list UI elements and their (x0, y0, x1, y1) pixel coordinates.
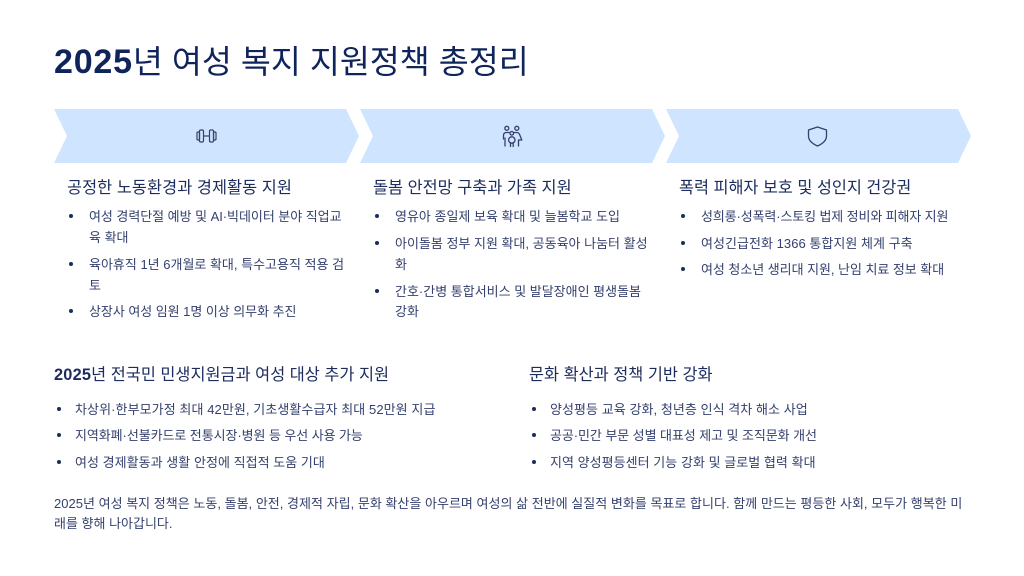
panel: labor (67, 178, 344, 319)
bullet list: livelihood support: 여성 경제활동과 생활 안정에 직접적 도움 기대 (75, 455, 325, 470)
bullet list: livelihood support: 지역화폐·선불카드로 전통시장·병원 등 우선 사용 가능 (75, 428, 363, 443)
bullet list: labor (69, 209, 344, 319)
bullet list: culture (532, 402, 817, 470)
icon: dumbbell (197, 130, 216, 142)
chevron 3 with shield icon (666, 109, 971, 163)
panel: livelihood support (54, 366, 436, 470)
heading: livelihood support: 2025년 전국민 민생지원금과 여성 대상 추가 지원 (54, 366, 389, 384)
bullet list: safety: 여성긴급전화 1366 통합지원 체계 구축 (701, 236, 913, 251)
heading: care: 돌봄 안전망 구축과 가족 지원 (373, 179, 572, 197)
bullet list: labor: 여성 경력단절 예방 및 AI·빅데이터 분야 직업교 (89, 209, 341, 224)
bullet list: safety: 성희롱·성폭력·스토킹 법제 정비와 피해자 지원 (701, 209, 948, 224)
panel: safety (679, 179, 948, 277)
title: 2025년 여성 복지 지원정책 총정리 (54, 43, 529, 81)
bullet list: labor: 육아휴직 1년 6개월로 확대, 특수고용직 적용 검 (89, 257, 344, 272)
bullet list: care: 강화 (395, 304, 419, 319)
icon: shield (808, 127, 826, 146)
closing text: 래를 향해 나아갑니다. (54, 516, 172, 531)
bullet list: safety: 여성 청소년 생리대 지원, 난임 치료 정보 확대 (701, 262, 944, 277)
chevron 1 with dumbbell icon (54, 109, 359, 163)
bullet list: culture: 지역 양성평등센터 기능 강화 및 글로벌 협력 확대 (550, 455, 816, 470)
bullet list: labor: 상장사 여성 임원 1명 이상 의무화 추진 (89, 304, 296, 319)
heading: safety: 폭력 피해자 보호 및 성인지 건강권 (679, 179, 911, 197)
bullet list: labor: 토 (89, 278, 101, 293)
closing text (54, 496, 962, 531)
bullet list: culture: 공공·민간 부문 성별 대표성 제고 및 조직문화 개선 (550, 428, 817, 443)
bullet list: safety (681, 209, 948, 277)
closing text: 2025년 여성 복지 정책은 노동, 돌봄, 안전, 경제적 자립, 문화 확산을 아우르며 여성의 삶 전반에 실질적 변화를 목표로 합니다. 함께 만드는 평등한 사회, 모두가 행복한 미 (54, 496, 962, 511)
bullet list: culture: 양성평등 교육 강화, 청년층 인식 격차 해소 사업 (550, 402, 808, 417)
bullet list: care: 화 (395, 257, 407, 272)
bullet list: labor: 육 확대 (89, 230, 128, 245)
panel: care (373, 179, 648, 319)
bullet list: care: 영유아 종일제 보육 확대 및 늘봄학교 도입 (395, 209, 620, 224)
panel: culture (529, 366, 817, 470)
heading: culture: 문화 확산과 정책 기반 강화 (529, 366, 713, 384)
bullet list: livelihood support: 차상위·한부모가정 최대 42만원, 기초생활수급자 최대 52만원 지급 (75, 402, 436, 417)
icon: family (504, 126, 522, 146)
chevron 2 with family icon (360, 109, 665, 163)
bullet list: livelihood support (57, 402, 436, 470)
bullet list: care: 간호·간병 통합서비스 및 발달장애인 평생돌봄 (395, 284, 641, 299)
heading: labor: 공정한 노동환경과 경제활동 지원 (67, 179, 292, 197)
bullet list: care: 아이돌봄 정부 지원 확대, 공동육아 나눔터 활성 (395, 236, 648, 251)
bullet list: care (375, 209, 648, 319)
